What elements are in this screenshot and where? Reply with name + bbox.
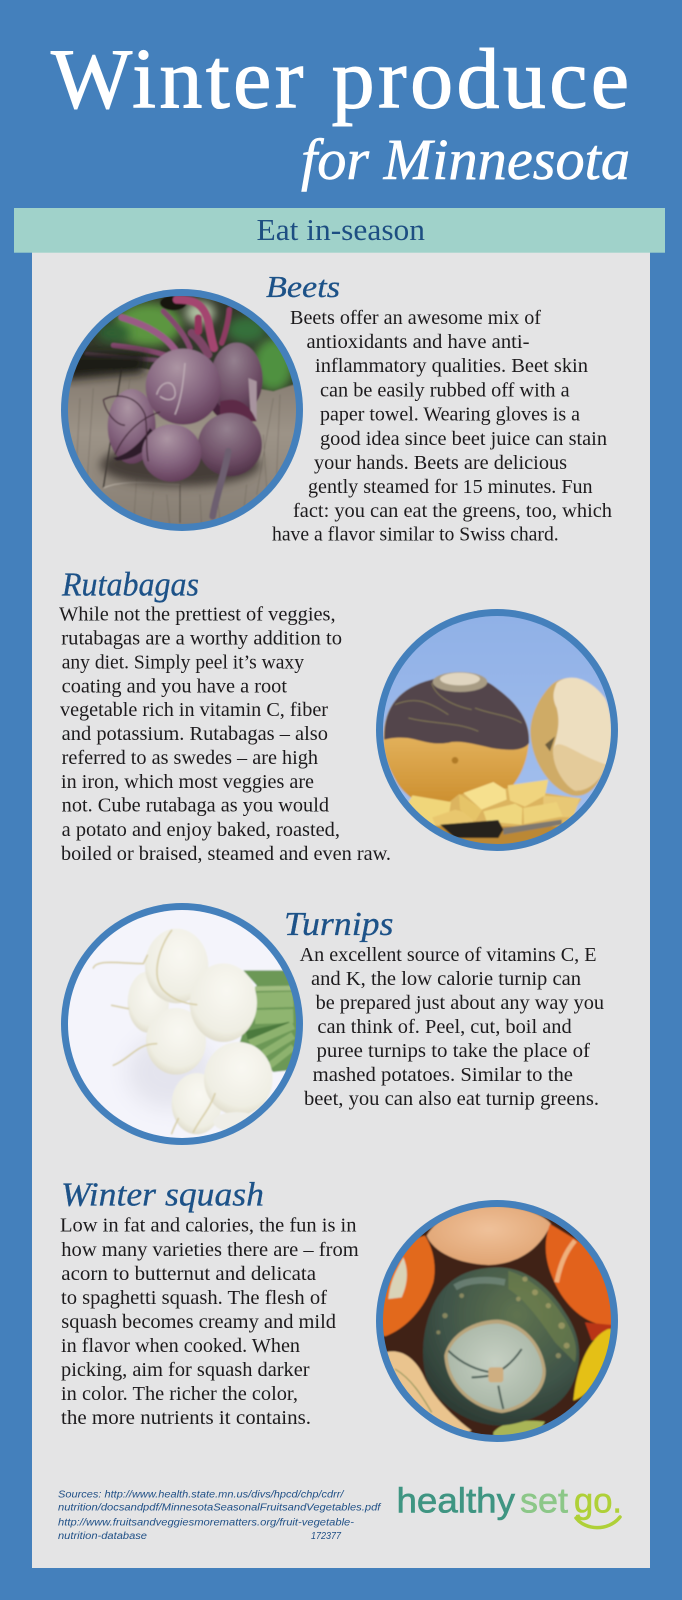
text: winter squash: how many varieties there are – from — [61, 1239, 359, 1261]
text: rutabagas: While not the prettiest of veggies, — [59, 603, 336, 625]
text: beets: gently steamed for 15 minutes. Fun — [308, 476, 593, 498]
title — [51, 30, 630, 192]
section: winter squash — [60, 1177, 619, 1443]
text: winter squash: in flavor when cooked. When — [61, 1335, 300, 1357]
text: beets: paper towel. Wearing gloves is a — [320, 404, 580, 426]
text: beets: Beets offer an awesome mix of — [290, 307, 541, 329]
text: turnips — [300, 944, 604, 1110]
text: turnips: beet, you can also eat turnip greens. — [304, 1088, 599, 1110]
sources: Sources: http://www.health.state.mn.us/divs/hpcd/chp/cdrr/ — [58, 1489, 345, 1500]
text: rutabagas: coating and you have a root — [62, 675, 287, 697]
photo: winter squash — [375, 1199, 619, 1443]
section: rutabagas — [59, 566, 619, 865]
icon: smile — [576, 1517, 620, 1528]
text: turnips: can think of. Peel, cut, boil and — [317, 1016, 572, 1038]
heading: winter squash: Winter squash — [61, 1177, 264, 1214]
text: rutabagas: any diet. Simply peel it’s waxy — [62, 652, 304, 674]
title: for Minnesota — [301, 127, 630, 192]
section: beets — [60, 269, 612, 546]
text: rutabagas: and potassium. Rutabagas – also — [62, 723, 328, 745]
text: beets: good idea since beet juice can stain — [320, 428, 607, 450]
sources: http://www.fruitsandveggiesmorematters.org/fruit-vegetable- — [58, 1518, 355, 1529]
photo: turnips — [60, 902, 304, 1146]
text: rutabagas: referred to as swedes – are high — [62, 747, 318, 769]
text: winter squash: acorn to butternut and delicata — [61, 1263, 316, 1285]
text: turnips: and K, the low calorie turnip can — [311, 968, 581, 990]
heading: beets: Beets — [266, 269, 340, 304]
text: rutabagas: rutabagas are a worthy addition to — [61, 628, 342, 650]
text: beets: inflammatory qualities. Beet skin — [315, 355, 588, 377]
text: winter squash: picking, aim for squash darker — [61, 1359, 310, 1381]
title: Winter produce — [51, 30, 629, 126]
logo: healthy set go: go. — [574, 1482, 622, 1520]
logo: healthy set go — [396, 1482, 622, 1528]
text: turnips: mashed potatoes. Similar to the — [313, 1064, 573, 1086]
text: rutabagas: vegetable rich in vitamin C, fiber — [60, 699, 328, 721]
logo: healthy set go: healthy — [396, 1482, 516, 1520]
heading: rutabagas: Rutabagas — [61, 566, 199, 604]
sources — [58, 1489, 382, 1542]
banner: eat in-season: Eat in-season — [256, 212, 426, 247]
text: beets — [272, 307, 612, 546]
text: rutabagas: in iron, which most veggies are — [61, 771, 314, 793]
text: winter squash: squash becomes creamy and mild — [61, 1311, 336, 1333]
text: turnips: be prepared just about any way you — [316, 992, 604, 1014]
text: winter squash: in color. The richer the color, — [61, 1383, 298, 1405]
text: winter squash: the more nutrients it contains. — [61, 1407, 311, 1429]
text: turnips: puree turnips to take the place of — [316, 1040, 590, 1062]
logo: healthy set go: set — [520, 1482, 568, 1520]
sources: nutrition-database — [58, 1531, 147, 1542]
text: winter squash: to spaghetti squash. The flesh of — [61, 1287, 327, 1309]
text: beets: have a flavor similar to Swiss chard. — [272, 524, 559, 546]
text: rutabagas — [59, 603, 391, 865]
photo: beets — [60, 288, 304, 532]
heading: turnips: Turnips — [284, 906, 394, 943]
text: turnips: An excellent source of vitamins C, E — [300, 944, 596, 966]
text: rutabagas: not. Cube rutabaga as you would — [62, 795, 329, 817]
section: turnips — [60, 902, 604, 1146]
text: rutabagas: a potato and enjoy baked, roasted, — [62, 819, 340, 841]
text: beets: can be easily rubbed off with a — [320, 380, 570, 402]
text: beets: your hands. Beets are delicious — [314, 452, 567, 474]
text: rutabagas: boiled or braised, steamed and even raw. — [61, 843, 391, 865]
text: winter squash — [60, 1215, 359, 1429]
text: winter squash: Low in fat and calories, the fun is in — [60, 1215, 356, 1237]
banner: eat in-season — [14, 208, 665, 253]
sources: 172377 — [311, 1531, 341, 1542]
content panel — [32, 240, 650, 1568]
photo: rutabagas — [375, 608, 619, 852]
sources: nutrition/docsandpdf/MinnesotaSeasonalFruitsandVegetables.pdf — [58, 1503, 382, 1514]
text: beets: antioxidants and have anti- — [306, 331, 530, 353]
text: beets: fact: you can eat the greens, too, which — [293, 500, 612, 522]
